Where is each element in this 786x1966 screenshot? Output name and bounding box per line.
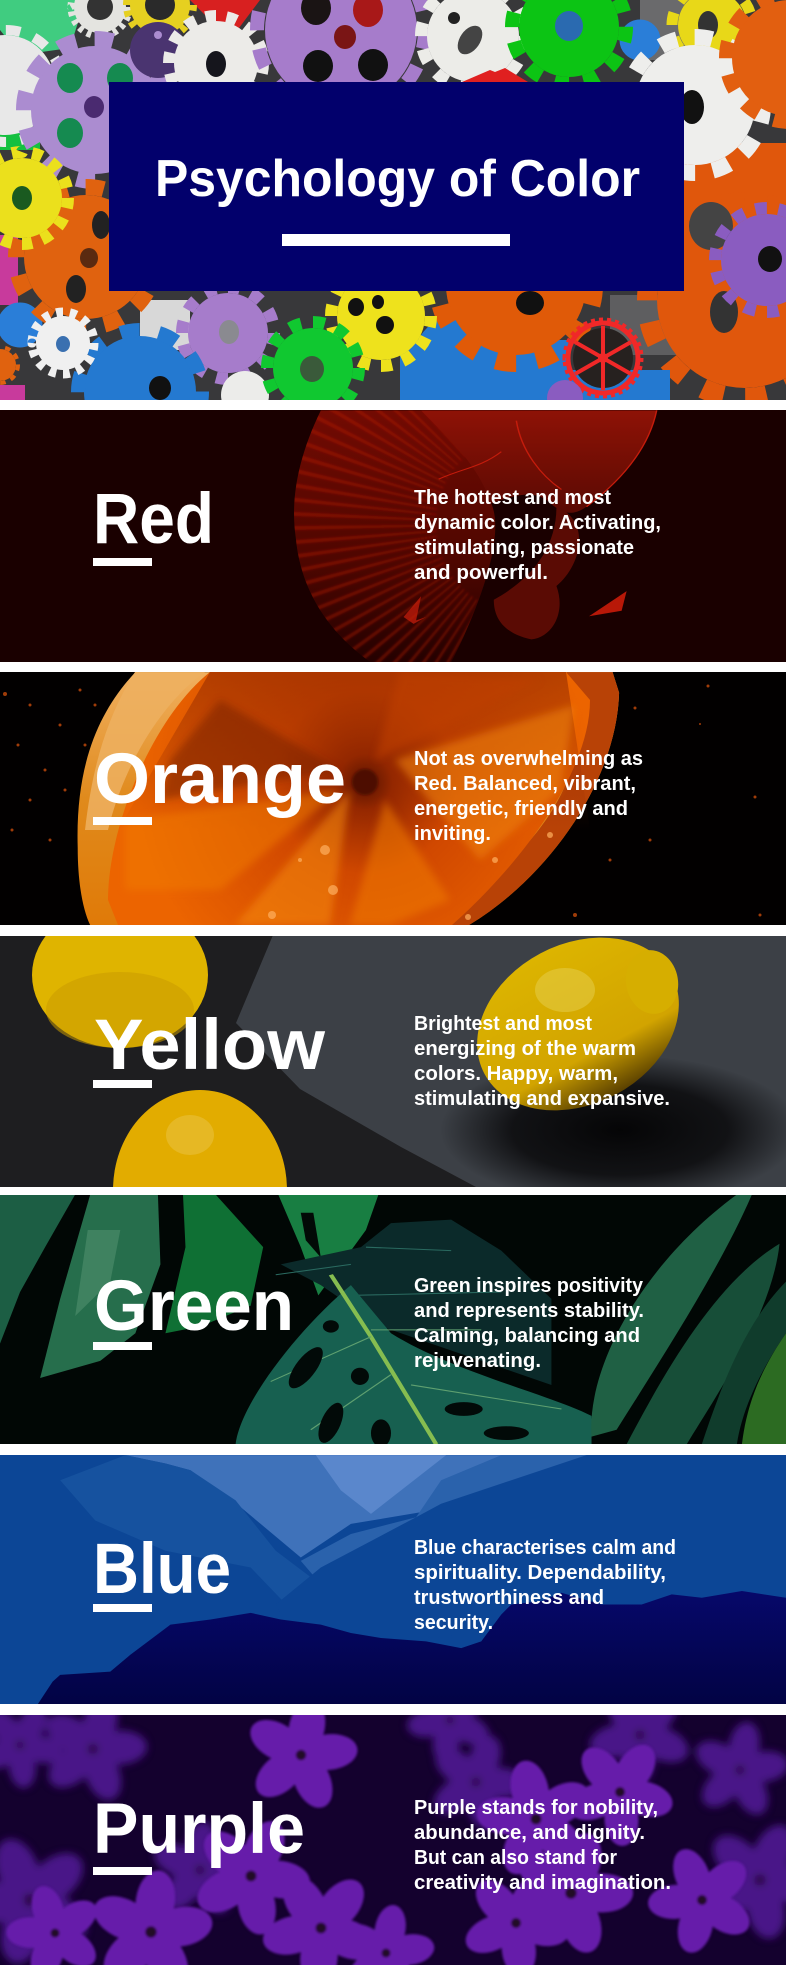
description: blue: spirituality. Dependability, (414, 1562, 666, 1584)
description: purple: But can also stand for (414, 1847, 617, 1869)
white gear right (627, 37, 763, 173)
description: orange (414, 748, 643, 845)
white gear top (421, 0, 525, 88)
lemon bottom (113, 1090, 287, 1187)
dark purple gear behind (130, 22, 186, 78)
description: red: The hottest and most (414, 487, 611, 509)
description: red (414, 487, 661, 584)
image: purple flowers (0, 1657, 786, 1966)
description: yellow: colors. Happy, warm, (414, 1063, 618, 1085)
description: purple (414, 1797, 671, 1894)
lemon right (477, 938, 679, 1110)
image: colorful gears background (0, 0, 786, 400)
description: orange: energetic, friendly and (414, 798, 628, 820)
description: red: stimulating, passionate (414, 537, 634, 559)
heading: Yellow: Yellow (94, 1006, 326, 1085)
description: green: Calming, balancing and (414, 1325, 640, 1347)
description: yellow: Brightest and most (414, 1013, 592, 1035)
image: blue mountains (0, 1455, 786, 1704)
yellow gear top (127, 0, 193, 38)
image: red betta fish (0, 410, 786, 662)
magenta patch (0, 385, 25, 400)
description: green: and represents stability. (414, 1300, 644, 1322)
yellow gear top right (666, 0, 756, 50)
panel: yellow (0, 936, 786, 1187)
description: red: dynamic color. Activating, (414, 512, 661, 534)
panel: blue (0, 1455, 786, 1704)
description: yellow (414, 1013, 670, 1110)
heading: Orange: Orange (94, 740, 346, 819)
heading: Red: Red (93, 480, 214, 559)
green gear bottom (267, 322, 359, 414)
description: blue: security. (414, 1612, 493, 1634)
panel: hero header (0, 0, 786, 400)
description: purple: abundance, and dignity. (414, 1822, 645, 1844)
description: orange: Red. Balanced, vibrant, (414, 773, 636, 795)
image: orange slice (0, 672, 786, 925)
white gear top left (71, 0, 129, 36)
title underline (282, 234, 510, 246)
panel: orange (0, 672, 786, 925)
heading: Green: Green (94, 1267, 294, 1346)
description: purple: creativity and imagination. (414, 1872, 671, 1894)
underline (93, 1604, 152, 1612)
lilac gear top centre (250, 0, 430, 82)
description: yellow: energizing of the warm (414, 1038, 636, 1060)
red gear tips (462, 68, 528, 82)
underline (93, 1867, 152, 1875)
underline (93, 817, 152, 825)
underline (93, 1080, 152, 1088)
panel: green (0, 1194, 786, 1447)
description: red: and powerful. (414, 562, 548, 584)
description: blue (414, 1537, 676, 1634)
green gear (512, 0, 626, 84)
white gear bottom (221, 371, 269, 400)
image: tropical leaves (0, 1194, 786, 1447)
panel: purple (0, 1657, 786, 1966)
lilac gear bottom (182, 287, 274, 379)
underline (93, 1342, 152, 1350)
blue gear bottom left (71, 323, 209, 400)
heading: Purple: Purple (93, 1790, 305, 1869)
description: green: rejuvenating. (414, 1350, 541, 1372)
purple gear right (715, 208, 786, 312)
yellow gear left (0, 152, 68, 244)
description: yellow: stimulating and expansive. (414, 1088, 670, 1110)
lilac gear left (24, 39, 166, 181)
orange small gear (0, 347, 18, 383)
small purple gear (547, 380, 583, 400)
white small gear (32, 312, 94, 374)
orange gear top right (726, 0, 786, 122)
description: blue: trustworthiness and (414, 1587, 604, 1609)
white progress gear (163, 10, 269, 82)
description: orange: inviting. (414, 823, 491, 845)
underline (93, 558, 152, 566)
lemon top left (32, 936, 208, 1048)
yellow gear bottom (331, 266, 431, 366)
big orange gear bottom (432, 291, 603, 372)
red wheel (565, 320, 641, 396)
big orange gear right (647, 143, 786, 398)
description: purple: Purple stands for nobility, (414, 1797, 658, 1819)
description: green (414, 1275, 644, 1372)
description: orange: Not as overwhelming as (414, 748, 643, 770)
title box (109, 82, 684, 291)
description: blue: Blue characterises calm and (414, 1537, 676, 1559)
orange gear left (16, 187, 156, 327)
description: green: Green inspires positivity (414, 1275, 644, 1297)
image: lemons on slate (0, 936, 786, 1187)
blue gear bottom (400, 320, 670, 400)
title: Psychology of Color (155, 150, 640, 208)
panel: red (0, 410, 786, 662)
heading: Blue: Blue (93, 1530, 231, 1609)
